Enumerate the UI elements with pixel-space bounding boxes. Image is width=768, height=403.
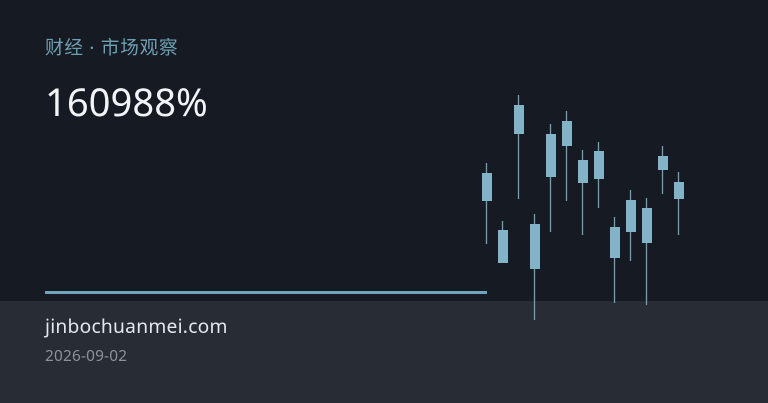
website domain: jinbochuanmei.com: [45, 312, 228, 339]
footer band: [0, 301, 768, 403]
date: 2026-09-02: [45, 345, 127, 366]
accent rule: [45, 291, 487, 294]
headline value: 160988%: [45, 76, 208, 128]
kicker heading: 财经 · 市场观察: [45, 35, 178, 60]
